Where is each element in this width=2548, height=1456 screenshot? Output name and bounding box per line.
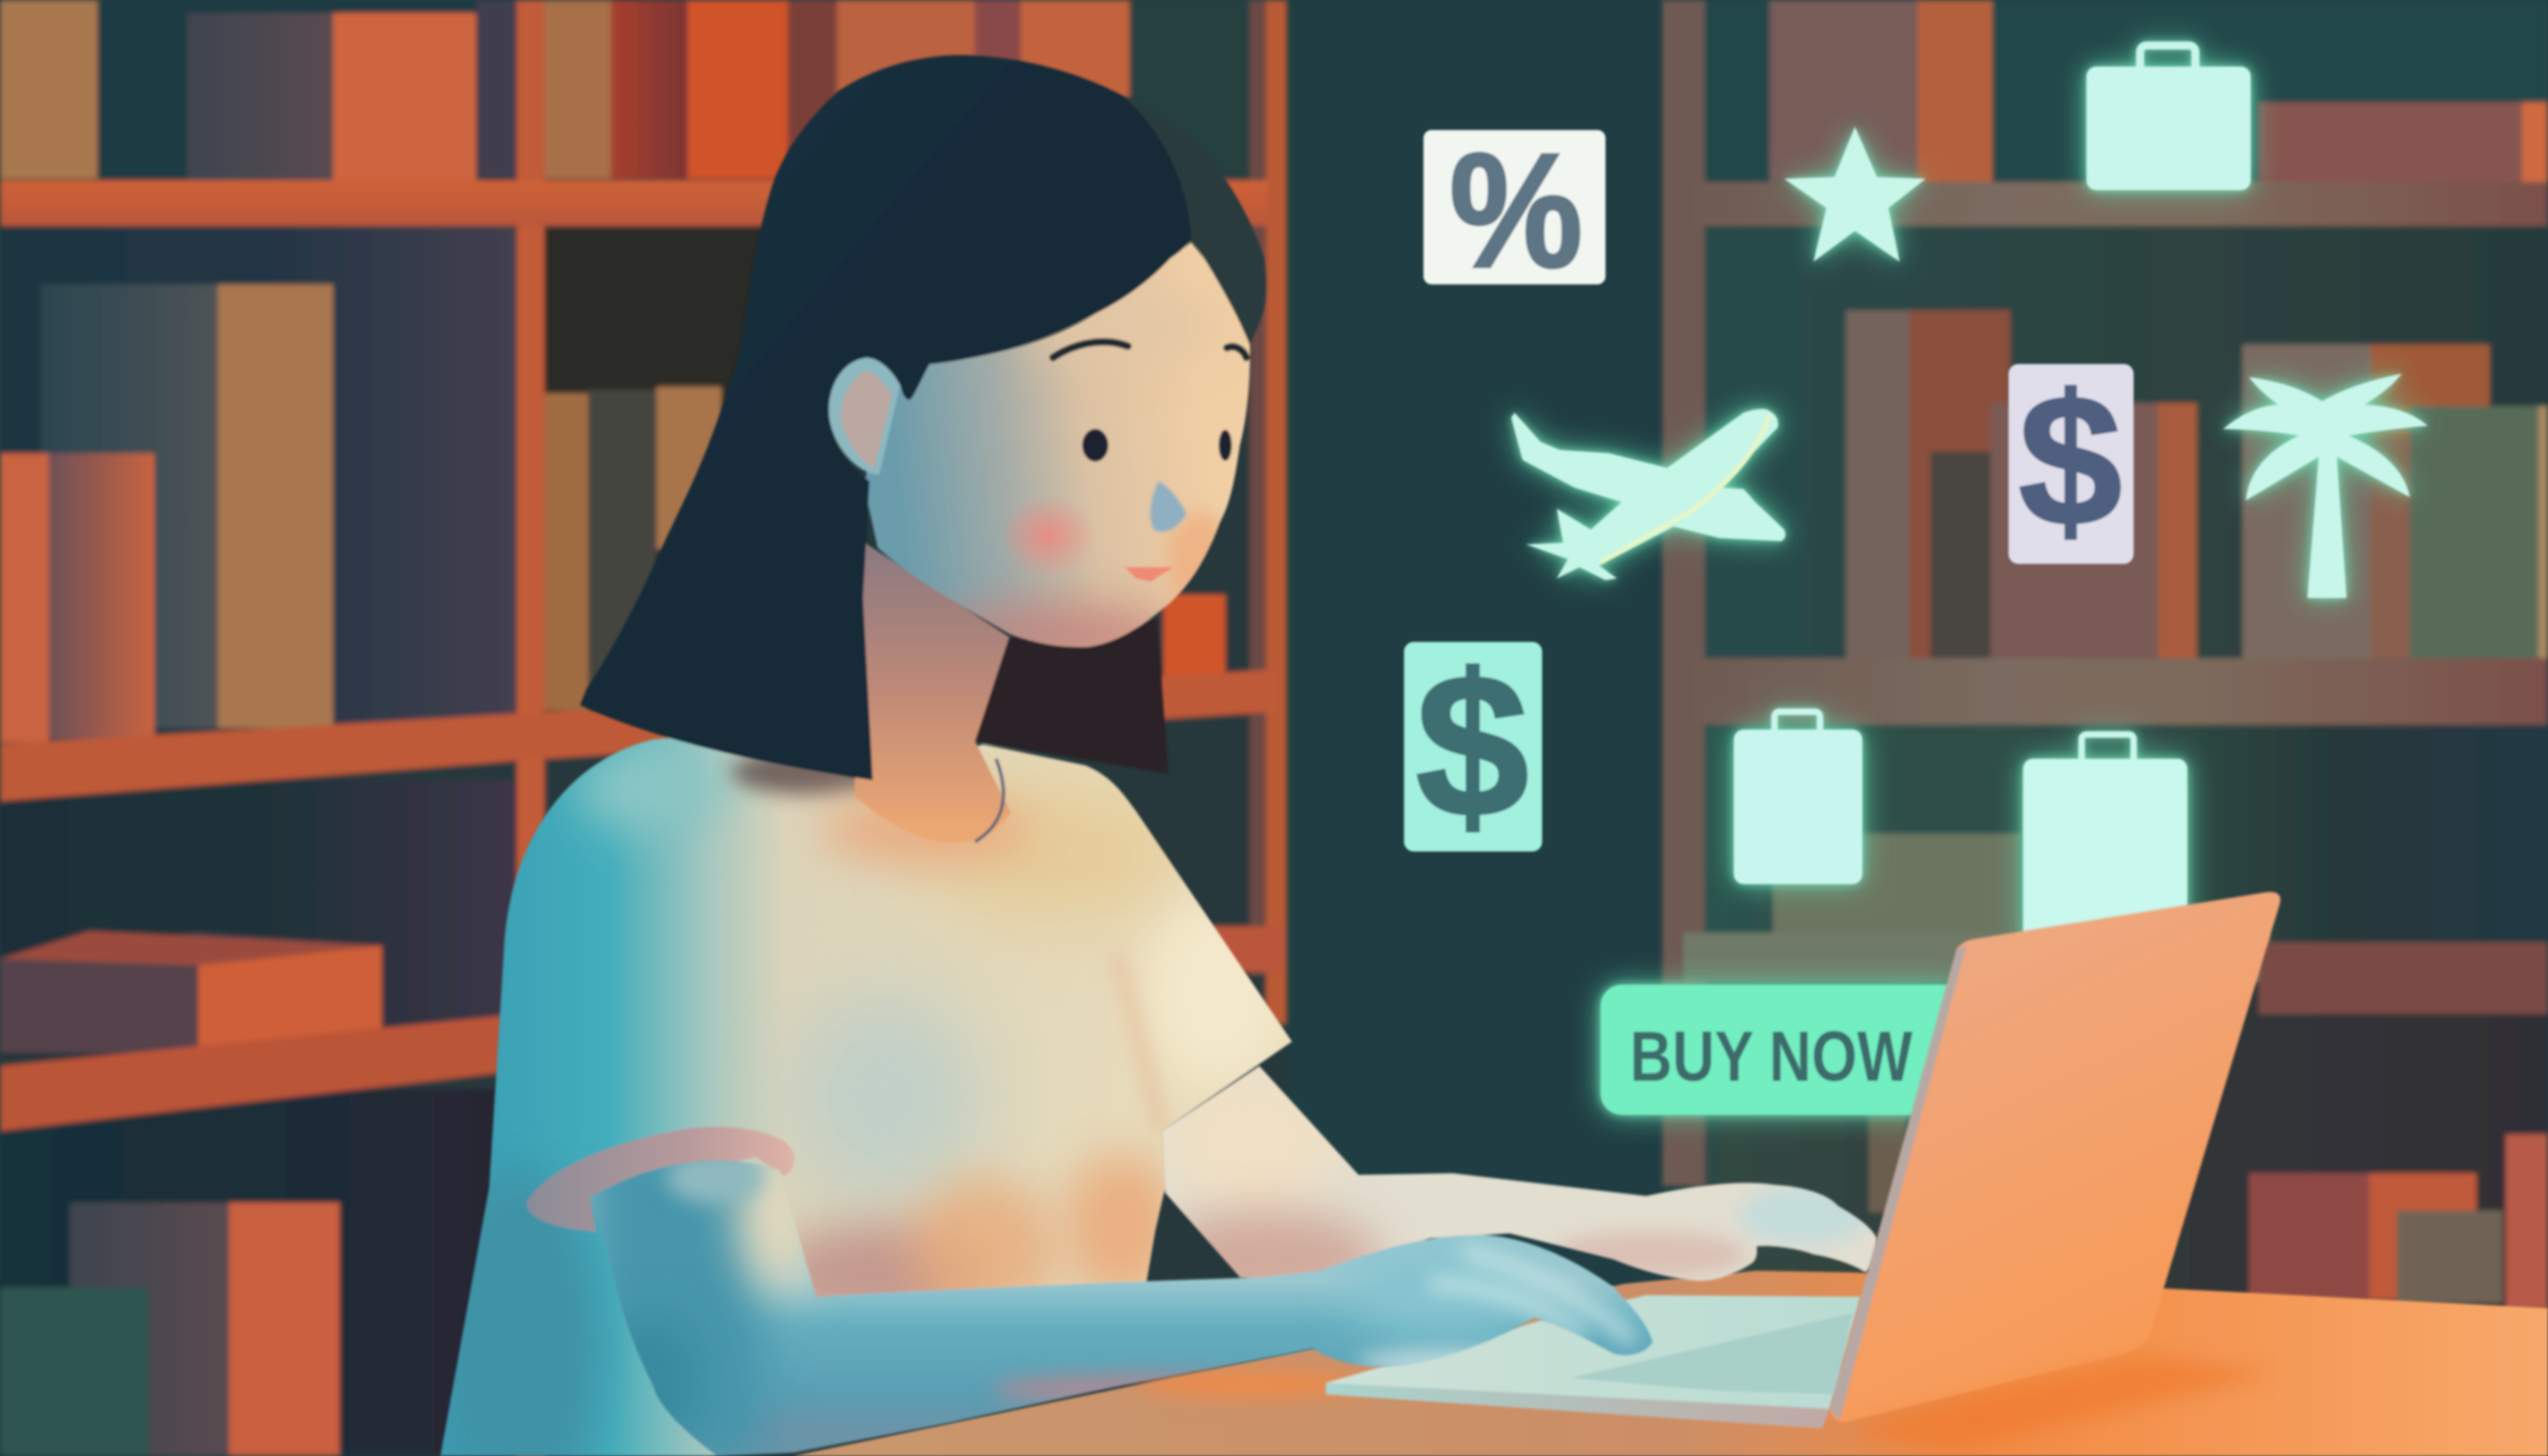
button: buy now: BUY NOW xyxy=(1630,1017,1913,1097)
middle row books left xyxy=(0,285,1225,742)
back arm xyxy=(1161,1065,1877,1282)
mouth xyxy=(1125,567,1173,582)
right bookshelf xyxy=(1662,0,2548,1317)
icon: airplane xyxy=(1511,409,1786,580)
icon: percent card: % xyxy=(1449,119,1583,302)
necklace xyxy=(975,759,1003,842)
neck xyxy=(820,536,1032,865)
cheek xyxy=(999,494,1097,578)
icon: dollar card right: $ xyxy=(2018,355,2122,564)
icon: shopping bag middle xyxy=(1734,712,1862,884)
top row books left xyxy=(0,0,1130,180)
books middle row right xyxy=(1846,311,2548,680)
shelf boards right xyxy=(1662,0,2548,1212)
laptop shadow on table xyxy=(1846,1356,2275,1449)
bottom row books left xyxy=(0,1202,339,1456)
left bookshelf xyxy=(0,0,1287,1456)
woman xyxy=(422,55,1901,1456)
sleeve cuff xyxy=(527,1127,794,1232)
icon: star xyxy=(1785,126,1926,262)
books lower row right xyxy=(1773,834,2548,1310)
icon: dollar card left: $ xyxy=(1415,633,1529,860)
icon: shopping bag behind laptop xyxy=(2023,734,2188,945)
ear xyxy=(829,357,900,475)
hair xyxy=(580,55,1266,780)
shirt xyxy=(422,715,1316,1456)
back hair xyxy=(975,619,1168,773)
laptop base xyxy=(1326,1295,1860,1428)
eyebrows xyxy=(1053,341,1246,357)
icon: palm tree xyxy=(2223,374,2428,598)
books top row right xyxy=(1770,0,2548,187)
icon: shopping bag top right xyxy=(2086,46,2250,190)
lower row box left xyxy=(0,932,382,1053)
button: buy now xyxy=(1600,984,1967,1115)
table xyxy=(793,1271,2548,1456)
front arm xyxy=(590,1158,1654,1456)
face xyxy=(853,236,1259,670)
eyes xyxy=(1082,429,1232,462)
laptop screen xyxy=(1829,892,2280,1422)
shelf boards left xyxy=(0,0,1287,1456)
nose xyxy=(1151,481,1186,531)
